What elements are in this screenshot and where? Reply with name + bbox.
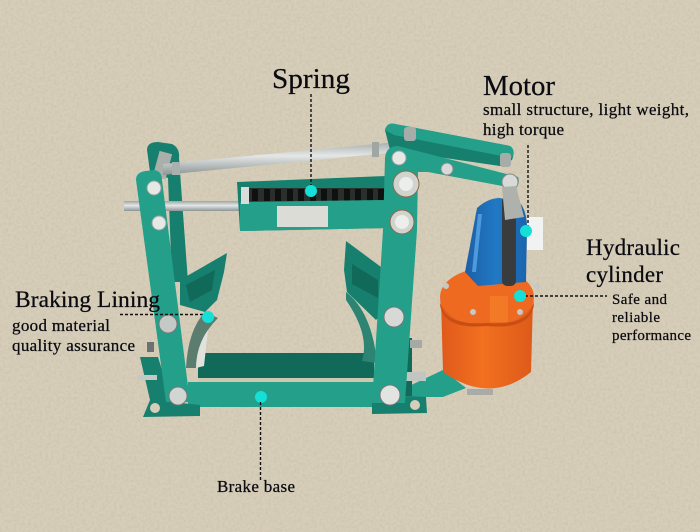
leader line: brake base bbox=[260, 402, 262, 480]
upper back lever bbox=[385, 124, 514, 167]
marker dot: spring bbox=[305, 185, 317, 197]
marker dot: braking lining bbox=[202, 311, 214, 323]
callout: brake base bbox=[217, 391, 295, 496]
leader line: motor bbox=[527, 145, 529, 226]
spring box bbox=[237, 176, 386, 231]
heading: Motor: Motor bbox=[483, 70, 555, 102]
text: cylinder description: performance bbox=[612, 328, 691, 344]
callout: motor bbox=[483, 70, 689, 237]
text: cylinder description: Safe and bbox=[612, 292, 668, 308]
brake base front bar bbox=[188, 378, 374, 407]
text: motor description: high torque bbox=[483, 120, 564, 139]
right foot plate and cylinder arm bbox=[372, 338, 466, 414]
heading: Hydraulic cylinder: cylinder bbox=[586, 262, 663, 287]
marker dot: brake base bbox=[255, 391, 267, 403]
lower rod bbox=[124, 201, 240, 211]
motor bbox=[465, 186, 543, 286]
leader line: braking lining bbox=[120, 314, 204, 316]
upper rod bbox=[163, 140, 418, 175]
hydraulic cylinder bbox=[440, 268, 540, 395]
text: braking lining description: good material bbox=[12, 316, 110, 335]
callout: hydraulic cylinder bbox=[514, 235, 691, 344]
nameplate bbox=[277, 206, 328, 227]
brake base back bar bbox=[198, 353, 374, 378]
callout: spring bbox=[272, 63, 350, 197]
marker dot: motor bbox=[520, 225, 532, 237]
marker dot: hydraulic cylinder bbox=[514, 290, 526, 302]
text: cylinder description: reliable bbox=[612, 310, 660, 326]
text: Brake base: Brake base bbox=[217, 477, 295, 496]
heading: Spring: Spring bbox=[272, 63, 350, 95]
back left arm bbox=[147, 142, 188, 282]
left front arm bbox=[136, 170, 190, 405]
leader line: spring bbox=[310, 94, 312, 188]
left brake shoe bbox=[180, 253, 227, 368]
left foot plate bbox=[137, 342, 200, 417]
right brake shoe bbox=[344, 241, 381, 363]
heading: Braking Lining: Braking Lining bbox=[15, 287, 160, 313]
right front arm and front lever bbox=[372, 146, 519, 405]
leader line: hydraulic cylinder bbox=[525, 295, 607, 297]
heading: Hydraulic cylinder: Hydraulic bbox=[586, 235, 680, 260]
text: braking lining description: quality assurance bbox=[12, 336, 135, 355]
text: motor description: small structure, light weight, bbox=[483, 100, 689, 119]
brake machine illustration bbox=[124, 124, 543, 417]
callout: braking lining bbox=[12, 287, 214, 355]
